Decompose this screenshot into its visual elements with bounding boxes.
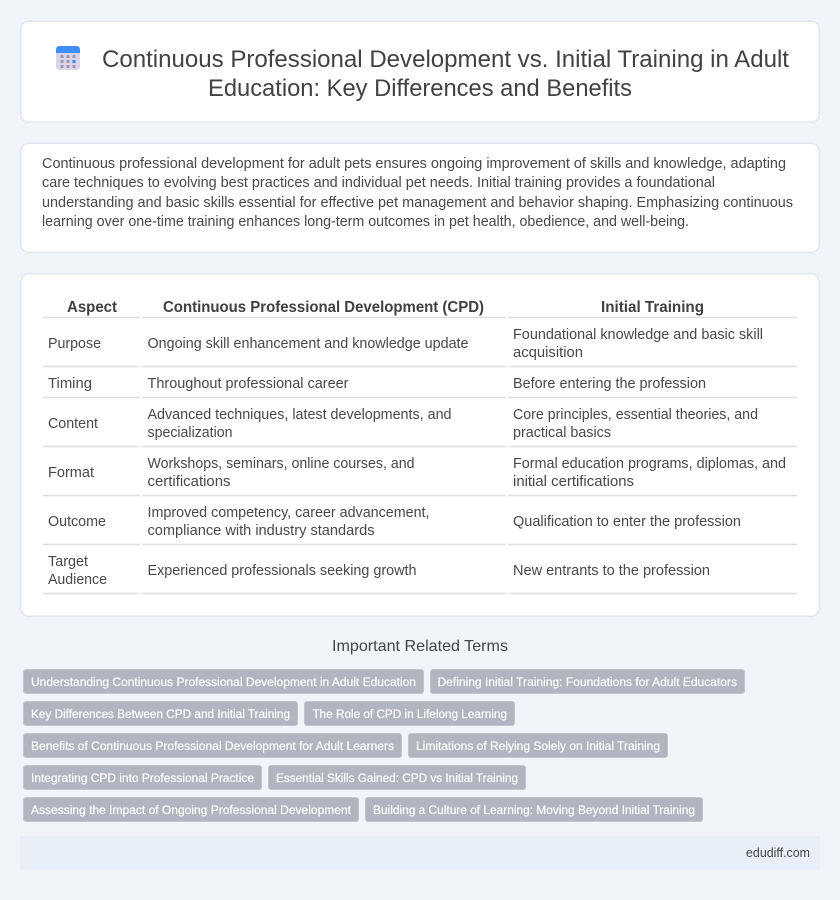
tag list: related terms: Building a Culture of Learning: Moving Beyond Initial Training bbox=[373, 803, 695, 817]
row: target audience: Experienced professionals seeking growth bbox=[148, 563, 416, 579]
row: timing bbox=[48, 376, 706, 392]
row: purpose: Foundational knowledge and basic skill bbox=[513, 327, 763, 343]
text block: introduction: understanding and basic skills essential for effective pet management and behavior shaping. Emphasizing continuous bbox=[42, 195, 793, 211]
title: Education: Key Differences and Benefits bbox=[208, 75, 632, 102]
row: content: Advanced techniques, latest developments, and bbox=[148, 407, 452, 423]
row: purpose: acquisition bbox=[513, 345, 583, 361]
tag list: related terms: Defining Initial Training: Foundations for Adult Educators bbox=[438, 675, 737, 689]
row: content: Core principles, essential theories, and bbox=[513, 407, 758, 423]
tag list: related terms: Assessing the Impact of Ongoing Professional Development bbox=[31, 803, 352, 817]
tag list: related terms: Understanding Continuous Professional Development in Adult Education bbox=[31, 675, 416, 689]
tag list: related terms: Limitations of Relying Solely on Initial Training bbox=[416, 739, 660, 753]
row: format bbox=[48, 456, 786, 490]
table header: Continuous Professional Development (CPD) bbox=[163, 299, 484, 316]
row: format: certifications bbox=[148, 474, 230, 490]
title: Continuous Professional Development vs. Initial Training in Adult bbox=[102, 46, 789, 73]
table header: Initial Training bbox=[601, 299, 704, 316]
row: format: Workshops, seminars, online courses, and bbox=[148, 456, 414, 472]
row: format: Formal education programs, diplomas, and bbox=[513, 456, 786, 472]
row: outcome: Improved competency, career advancement, bbox=[148, 505, 430, 521]
row: outcome: compliance with industry standards bbox=[148, 523, 374, 539]
row: purpose: Purpose bbox=[48, 336, 101, 352]
row: outcome: Outcome bbox=[48, 514, 106, 530]
footer: edudiff.com bbox=[746, 846, 810, 860]
table header bbox=[67, 299, 704, 316]
panel: comparison table bbox=[21, 274, 819, 616]
tag list: related terms: Integrating CPD into Professional Practice bbox=[31, 771, 254, 785]
row: content bbox=[48, 407, 758, 441]
tag list: related terms: The Role of CPD in Lifelong Learning bbox=[312, 707, 507, 721]
text block: introduction bbox=[42, 156, 793, 230]
title bbox=[102, 46, 789, 102]
row: target audience: Audience bbox=[48, 572, 107, 588]
row: timing: Timing bbox=[48, 376, 92, 392]
row: format: initial certifications bbox=[513, 474, 634, 490]
row: outcome: Qualification to enter the profession bbox=[513, 514, 741, 530]
row: purpose bbox=[48, 327, 763, 361]
row: content: specialization bbox=[148, 425, 232, 441]
tag list: related terms: Essential Skills Gained: CPD vs Initial Training bbox=[276, 771, 518, 785]
row: purpose: Ongoing skill enhancement and knowledge update bbox=[148, 336, 468, 352]
heading: important related terms: Important Related Terms bbox=[332, 638, 508, 655]
icon: calendar bbox=[56, 46, 80, 70]
tag list: related terms bbox=[24, 670, 744, 822]
panel: introduction bbox=[21, 143, 819, 252]
row: content: practical basics bbox=[513, 425, 611, 441]
text block: introduction: care techniques to evolving best practices and individual pet needs. Initial training provides a foundational bbox=[42, 175, 715, 191]
row: timing: Throughout professional career bbox=[148, 376, 349, 392]
row: target audience bbox=[48, 554, 710, 588]
row: target audience: New entrants to the profession bbox=[513, 563, 710, 579]
row: outcome bbox=[48, 505, 741, 539]
tag list: related terms: Benefits of Continuous Professional Development for Adult Learners bbox=[31, 739, 394, 753]
row: timing: Before entering the profession bbox=[513, 376, 706, 392]
footer bbox=[20, 836, 820, 870]
panel: title card bbox=[21, 21, 819, 122]
row: content: Content bbox=[48, 416, 98, 432]
row: format: Format bbox=[48, 465, 94, 481]
table header: Aspect bbox=[67, 299, 118, 316]
row: target audience: Target bbox=[48, 554, 88, 570]
text block: introduction: learning over one-time training enhances long-term outcomes in pet health, obedience, and well-being. bbox=[42, 214, 689, 230]
tag list: related terms: Key Differences Between CPD and Initial Training bbox=[31, 707, 290, 721]
text block: introduction: Continuous professional development for adult pets ensures ongoing improvement of skills and knowledge, adapting bbox=[42, 156, 786, 172]
